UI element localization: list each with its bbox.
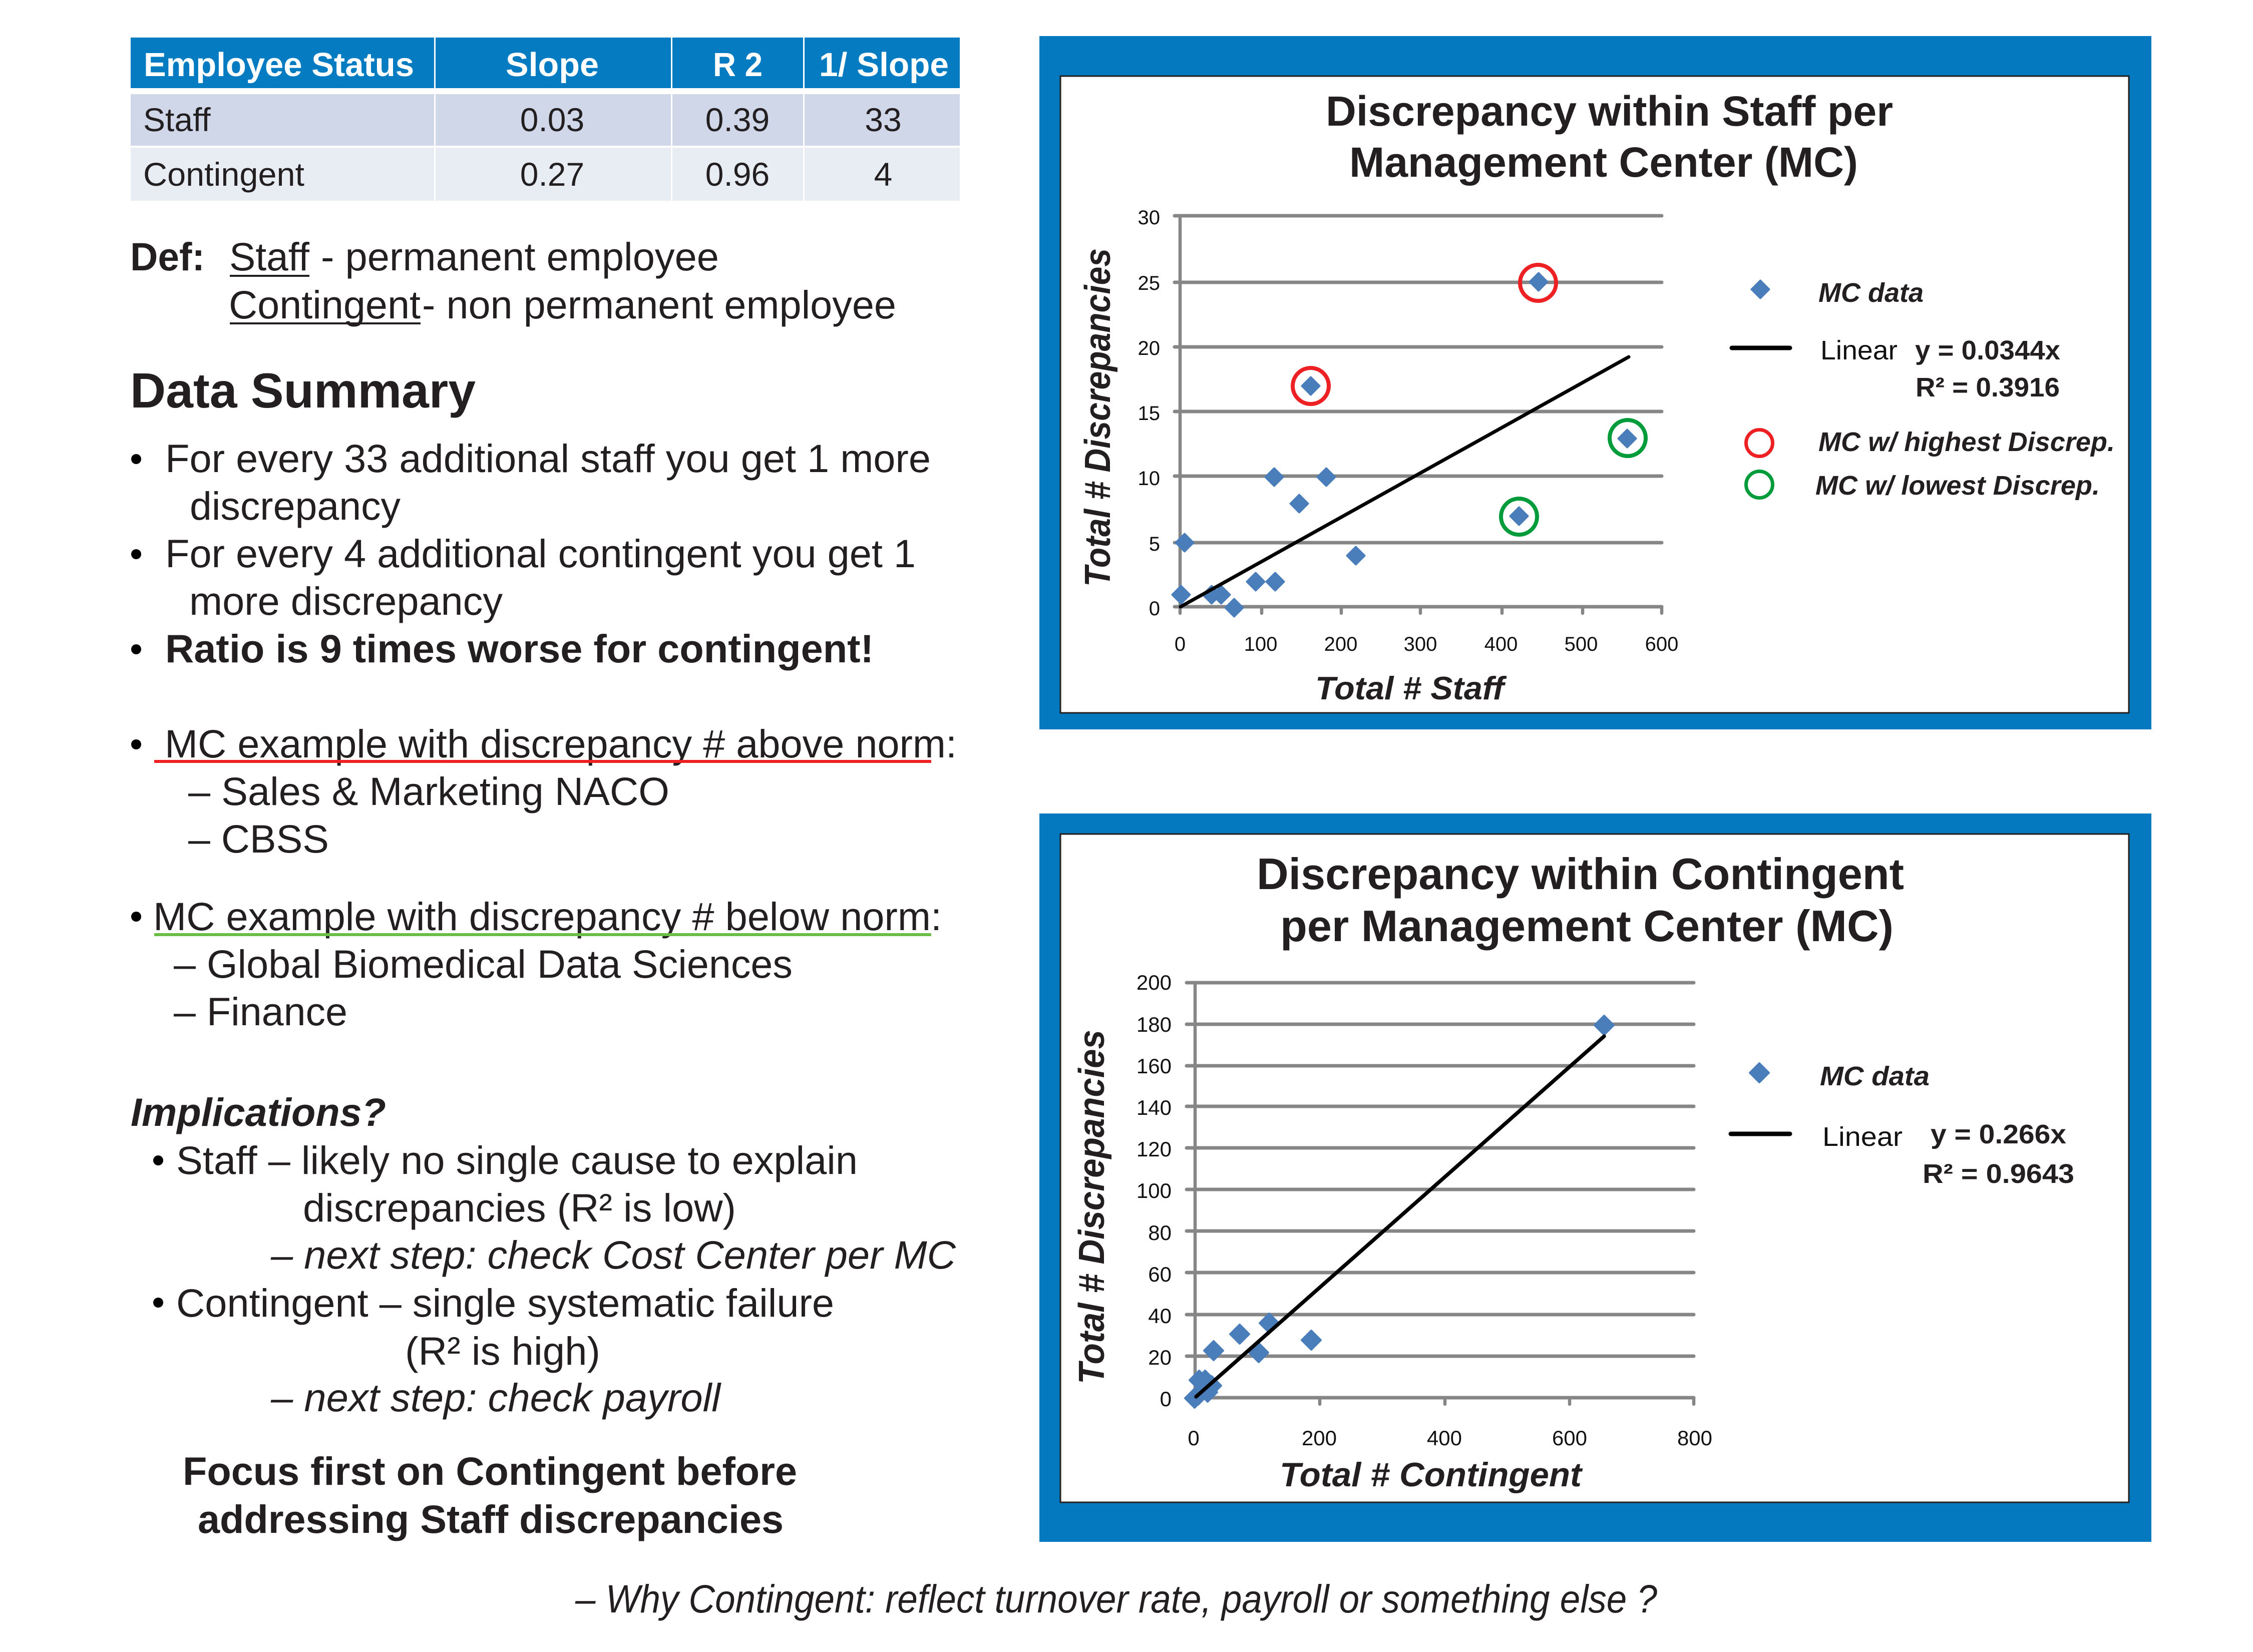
y axis labels: 0 — [1160, 1387, 1172, 1411]
legend: staff: MC data — [1818, 278, 1924, 308]
scatter plot: contingent — [1137, 971, 1712, 1450]
definitions text block: Staff — [229, 234, 310, 279]
above-norm examples: MC example with discrepancy # above norm: — [165, 721, 957, 766]
definitions text block — [130, 234, 896, 327]
below-norm examples — [131, 894, 942, 1034]
y axis labels: 160 — [1137, 1054, 1172, 1078]
legend: staff: MC w/ lowest Discrep. — [1815, 471, 2100, 501]
definitions text block: - permanent employee — [321, 234, 719, 279]
trend line — [1181, 357, 1629, 607]
above-norm examples: – CBSS — [188, 816, 329, 861]
table row: contingent — [131, 148, 960, 201]
chart title: contingent — [1257, 849, 1904, 951]
x axis labels: 100 — [1244, 633, 1277, 655]
highlight circles: lowest discrepancy — [1501, 420, 1646, 535]
x axis labels: 0 — [1175, 633, 1186, 655]
chart title: contingent: per Management Center (MC) — [1280, 901, 1894, 951]
table header row: 1/ Slope — [819, 46, 949, 84]
table row: contingent: 0.96 — [705, 156, 770, 193]
table row: contingent: 0.27 — [520, 156, 584, 193]
legend: contingent: y = 0.266x — [1931, 1119, 2066, 1149]
legend: staff: y = 0.0344x — [1915, 335, 2060, 365]
implications text block: – next step: check payroll — [270, 1375, 721, 1420]
x axis labels: 800 — [1677, 1426, 1712, 1450]
y axis labels — [1138, 207, 1160, 620]
definitions text block: Def: — [130, 234, 205, 279]
y axis labels: 100 — [1137, 1179, 1172, 1202]
chart title: staff: Management Center (MC) — [1349, 139, 1858, 186]
y axis title: staff: Total # Discrepancies — [1078, 248, 1118, 587]
scatter plot: staff — [1138, 207, 1678, 655]
table row: contingent: 4 — [874, 156, 892, 193]
table header row — [131, 38, 960, 88]
table row: contingent: Contingent — [143, 156, 304, 193]
implications text block: (R² is high) — [405, 1329, 600, 1373]
x axis labels: 400 — [1427, 1426, 1462, 1450]
x axis labels: 0 — [1188, 1426, 1200, 1450]
x axis labels: 200 — [1302, 1426, 1337, 1450]
chart title: staff: Discrepancy within Staff per — [1326, 88, 1893, 135]
legend: contingent — [1731, 1061, 2074, 1189]
panel: staff discrepancy chart — [1039, 36, 2151, 729]
data points — [1173, 273, 1636, 617]
below-norm examples: MC example with discrepancy # below norm: — [153, 894, 942, 939]
trend line — [1196, 1036, 1604, 1397]
legend: staff: MC w/ highest Discrep. — [1818, 427, 2115, 457]
y axis labels: 5 — [1149, 533, 1160, 555]
x axis labels: 600 — [1645, 633, 1678, 655]
implications text block: discrepancies (R² is low) — [303, 1185, 736, 1230]
data summary bullets: For every 33 additional staff you get 1 more — [165, 436, 931, 481]
panel: contingent discrepancy chart — [1039, 813, 2151, 1542]
callout: focus first on contingent — [183, 1449, 797, 1541]
x axis title: staff: Total # Staff — [1315, 670, 1507, 706]
y axis title: contingent: Total # Discrepancies — [1072, 1030, 1112, 1384]
y axis labels: 25 — [1138, 272, 1160, 294]
table row: staff: Staff — [143, 101, 211, 138]
data summary bullets: more discrepancy — [189, 579, 503, 623]
table row: staff: 0.39 — [705, 101, 770, 138]
footer question: – Why Contingent: reflect turnover rate, payroll or something else ? — [575, 1576, 1657, 1621]
definitions text block: Contingent — [229, 282, 421, 327]
y axis labels: 30 — [1138, 207, 1160, 229]
x axis labels: 200 — [1324, 633, 1357, 655]
below-norm examples: – Finance — [174, 989, 347, 1034]
legend: staff: R² = 0.3916 — [1916, 372, 2060, 402]
implications text block: Staff – likely no single cause to explain — [176, 1138, 858, 1182]
y axis labels: 0 — [1149, 598, 1160, 620]
x axis title: contingent: Total # Contingent — [1280, 1456, 1583, 1494]
y axis labels: 20 — [1148, 1346, 1172, 1369]
x axis labels: 300 — [1404, 633, 1437, 655]
data summary bullets: For every 4 additional contingent you get 1 — [165, 531, 916, 576]
legend: contingent: R² = 0.9643 — [1923, 1159, 2074, 1189]
table header row: R 2 — [713, 46, 763, 84]
y axis labels: 10 — [1138, 468, 1160, 490]
y axis labels — [1137, 971, 1172, 1411]
table row: staff: 0.03 — [520, 101, 584, 138]
data summary bullets: discrepancy — [190, 484, 401, 528]
x axis labels: 500 — [1565, 633, 1598, 655]
x axis labels — [1175, 633, 1678, 655]
table: employee status slopes — [131, 38, 960, 201]
highlight circles: highest discrepancy — [1293, 265, 1556, 404]
definitions text block: - non permanent employee — [422, 282, 896, 327]
implications text block: – next step: check Cost Center per MC — [270, 1232, 956, 1277]
callout: focus first on contingent: addressing Staff discrepancies — [198, 1497, 784, 1541]
table header row: Slope — [506, 46, 599, 84]
legend: staff: Linear — [1820, 335, 1898, 365]
chart title: staff — [1326, 88, 1893, 186]
above-norm examples — [131, 721, 957, 861]
y axis labels: 180 — [1137, 1013, 1172, 1036]
above-norm examples: – Sales & Marketing NACO — [188, 769, 669, 813]
chart title: contingent: Discrepancy within Contingent — [1257, 849, 1904, 899]
y axis labels: 80 — [1148, 1221, 1172, 1245]
data summary bullets: Ratio is 9 times worse for contingent! — [165, 626, 874, 671]
y axis labels: 60 — [1148, 1263, 1172, 1286]
table row: staff — [131, 94, 960, 146]
legend: contingent: Linear — [1822, 1122, 1903, 1152]
heading: data summary: Data Summary — [130, 363, 476, 418]
below-norm examples: – Global Biomedical Data Sciences — [174, 942, 793, 986]
x axis labels: 600 — [1552, 1426, 1587, 1450]
data points — [1185, 1016, 1614, 1408]
x axis labels — [1188, 1426, 1712, 1450]
implications text block: Contingent – single systematic failure — [176, 1281, 834, 1325]
y axis labels: 120 — [1137, 1137, 1172, 1161]
y axis labels: 15 — [1138, 402, 1160, 425]
y axis labels: 40 — [1148, 1304, 1172, 1328]
implications text block: Implications? — [131, 1090, 386, 1134]
x axis labels: 400 — [1484, 633, 1518, 655]
y axis labels: 200 — [1137, 971, 1172, 994]
table row: staff: 33 — [865, 101, 902, 138]
legend: staff — [1732, 278, 2115, 501]
y axis labels: 140 — [1137, 1096, 1172, 1119]
y axis labels: 20 — [1138, 337, 1160, 359]
table header row: Employee Status — [144, 46, 414, 84]
data summary bullets — [131, 436, 931, 671]
callout: focus first on contingent: Focus first on Contingent before — [183, 1449, 797, 1493]
legend: contingent: MC data — [1820, 1061, 1930, 1091]
implications text block — [131, 1090, 956, 1420]
